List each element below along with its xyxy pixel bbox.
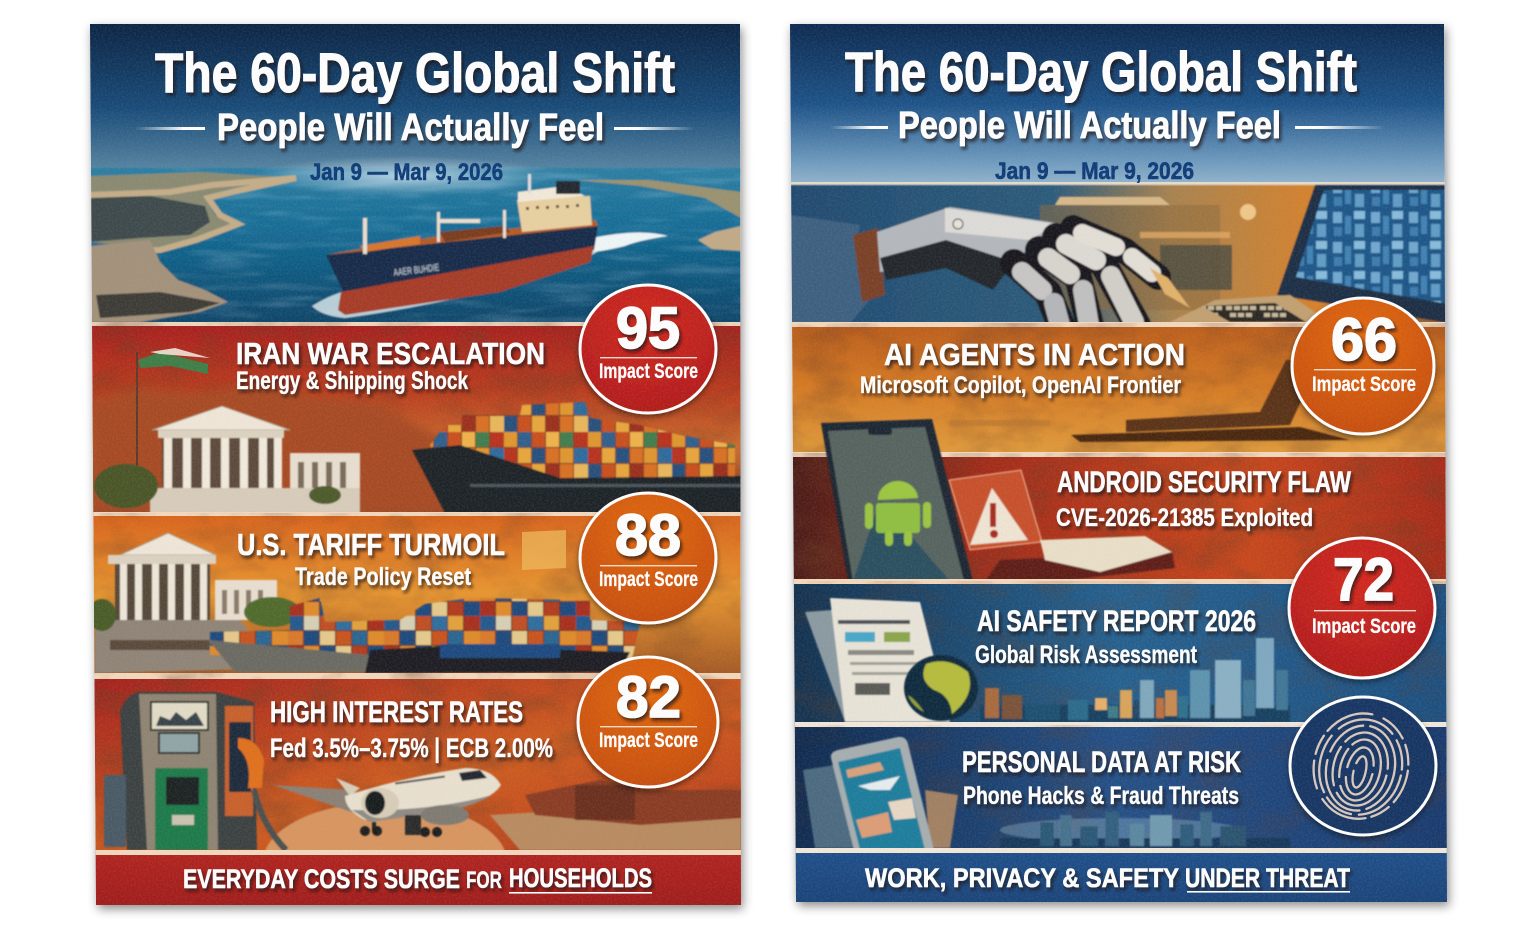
badge: score 72: 72: [1333, 546, 1394, 613]
heading: AI safety: AI SAFETY REPORT 2026: [977, 605, 1256, 638]
heading: AI agents: AI AGENTS IN ACTION: [884, 337, 1185, 372]
illustration: government building: [94, 406, 360, 513]
sleeve: [790, 215, 868, 323]
badge: score 66: [1292, 298, 1434, 434]
panel: footer, technology: UNDER THREAT: [1185, 863, 1350, 893]
panel: left poster, costs: [88, 24, 742, 922]
illustration: mountains: [90, 384, 741, 513]
panel: footer, costs: FOR: [466, 867, 502, 894]
badge: score 95: 95: [616, 296, 680, 361]
panel: AI agents in action: [790, 322, 1448, 453]
laptop: [1277, 185, 1448, 323]
illustration: robot hand and laptop: [790, 185, 1448, 325]
icon: fuel pump: [104, 692, 286, 850]
title: right: The 60-Day Global Shift: [845, 40, 1357, 103]
illustration: sand and harbor: [264, 780, 741, 850]
illustration: report documents: [805, 598, 950, 722]
heading: interest rates: HIGH INTEREST RATES: [270, 696, 523, 729]
icon: flag: [136, 348, 210, 466]
heading: Android flaw: CVE-2026-21385 Exploited: [1056, 504, 1313, 532]
icon: phone with floating cards: [803, 737, 958, 850]
heading: interest rates: Fed 3.5%–3.75% | ECB 2.00%: [270, 733, 553, 763]
badge: score 82: [578, 657, 718, 787]
panel: footer, technology: [790, 848, 1448, 903]
date: left: Jan 9 — Mar 9, 2026: [310, 159, 503, 186]
title: left: The 60-Day Global Shift: [155, 41, 675, 104]
heading: personal data: [962, 746, 1241, 810]
panel: footer, costs: EVERYDAY COSTS SURGE: [183, 864, 460, 894]
badge: score 82: 82: [616, 665, 681, 730]
heading: AI agents: [860, 337, 1185, 399]
illustration: warning card: [949, 470, 1175, 581]
illustration: airplane: [273, 768, 501, 837]
heading: personal data: PERSONAL DATA AT RISK: [962, 746, 1241, 779]
heading: Iran war escalation: Energy & Shipping Shock: [236, 367, 468, 395]
illustration: container ship: [412, 402, 741, 513]
badge: score 72: [1289, 538, 1435, 678]
subtitle: left: People Will Actually Feel: [217, 107, 604, 149]
heading: tariff turmoil: Trade Policy Reset: [295, 563, 472, 591]
panel: personal data at risk: [790, 722, 1448, 850]
illustration: tanker in strait: [90, 156, 742, 323]
badge: score 72: Impact Score: [1312, 615, 1416, 638]
panel: Android security flaw: [790, 419, 1448, 581]
badge: score 88: Impact Score: [599, 568, 698, 591]
panel: footer, costs: [90, 850, 742, 905]
header band: left poster: [90, 24, 742, 176]
panel: Iran war escalation: [90, 322, 742, 513]
heading: tariff turmoil: [237, 527, 505, 591]
heading: Android flaw: ANDROID SECURITY FLAW: [1057, 466, 1352, 499]
badge: score 66: Impact Score: [1312, 373, 1416, 396]
icon: globe: [904, 655, 978, 721]
forearm: [877, 207, 1056, 285]
badge: score 95: Impact Score: [599, 360, 698, 383]
header band: right poster: [790, 24, 1448, 184]
illustration: building: [88, 533, 300, 673]
illustration: laptop silhouette: [950, 360, 1350, 442]
badge: score 66: 66: [1331, 306, 1397, 373]
panel: footer, costs: HOUSEHOLDS: [509, 863, 652, 893]
fingers: [1014, 228, 1158, 325]
heading: personal data: Phone Hacks & Fraud Threats: [963, 782, 1239, 810]
illustration: flag shape: [522, 530, 566, 570]
illustration: cargo stacks: [208, 598, 640, 673]
heading: AI agents: Microsoft Copilot, OpenAI Frontier: [860, 372, 1181, 399]
badge: score 88: [580, 493, 716, 623]
badge: score 82: Impact Score: [599, 729, 698, 752]
date: right: Jan 9 — Mar 9, 2026: [995, 158, 1194, 185]
heading: tariff turmoil: U.S. TARIFF TURMOIL: [237, 527, 505, 562]
subtitle: right: People Will Actually Feel: [898, 105, 1281, 147]
illustration: skyline: [1000, 812, 1290, 848]
badge: score 88: 88: [615, 503, 681, 568]
icon: phone with Android: [821, 419, 973, 581]
heading: interest rates: [270, 696, 553, 763]
panel: right poster, technology: [790, 24, 1448, 903]
panel: high interest rates: [94, 673, 741, 851]
panel: AI safety report: [790, 579, 1448, 725]
heading: AI safety: [975, 605, 1256, 669]
heading: AI safety: Global Risk Assessment: [975, 641, 1198, 669]
illustration: tanker in strait: AAER BUHDIE: [393, 262, 440, 279]
badge: score 95: [580, 285, 716, 413]
illustration: city skyline: [980, 638, 1290, 722]
heading: Iran war escalation: IRAN WAR ESCALATION: [236, 336, 545, 371]
heading: Iran war escalation: [236, 336, 545, 395]
heading: Android flaw: [1056, 466, 1352, 532]
badge: fingerprint: [1290, 697, 1436, 835]
panel: footer, technology: WORK, PRIVACY & SAFETY: [865, 863, 1179, 893]
panel: U.S. tariff turmoil: [88, 512, 742, 673]
